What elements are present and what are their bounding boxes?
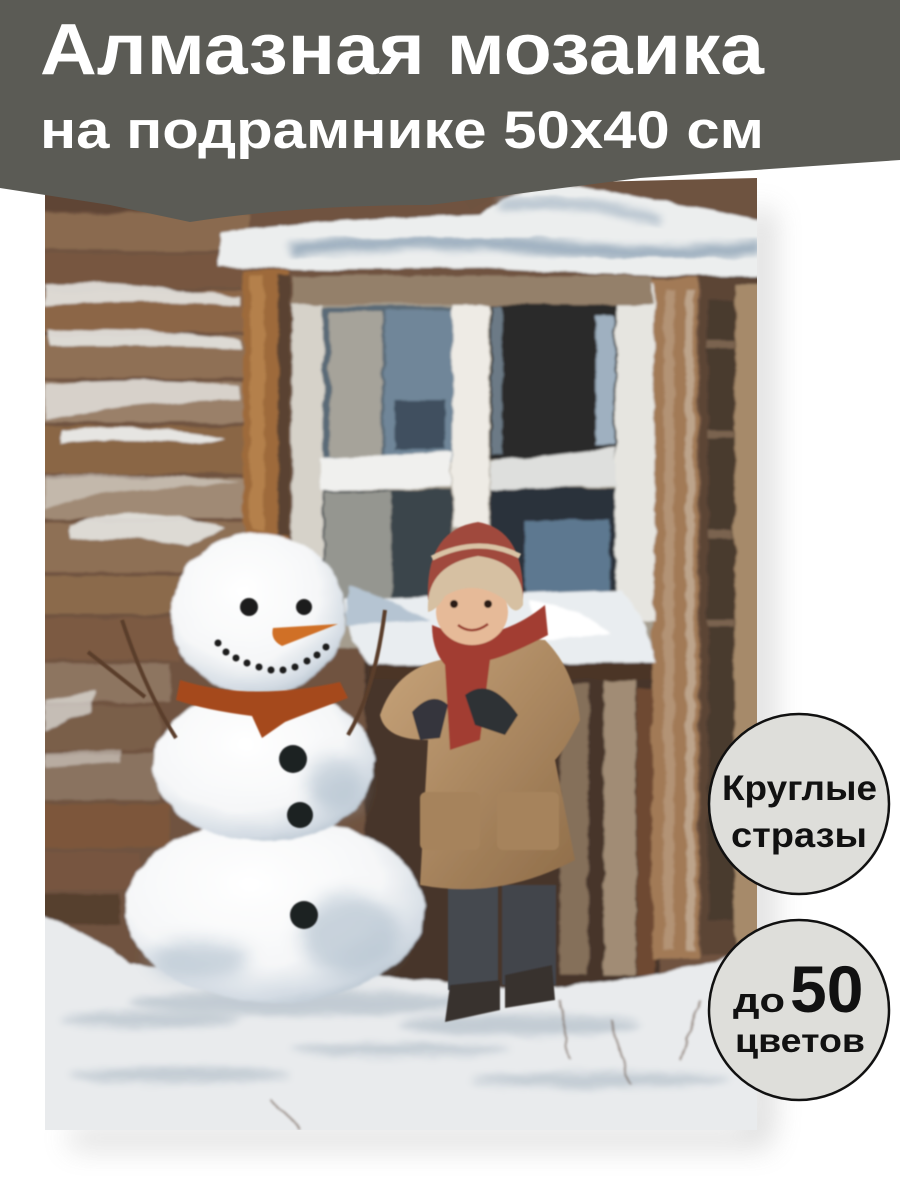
face [436, 579, 508, 645]
snowman features [88, 598, 385, 929]
snowman [125, 533, 425, 1003]
subtitle: на подрамнике 50х40 см [40, 101, 764, 160]
badge: up to 50 colours: до [733, 982, 785, 1020]
snow ground [45, 914, 757, 1130]
coat [380, 639, 580, 889]
snow on logs [45, 283, 240, 768]
badge: round rhinestones [709, 714, 889, 894]
wooden door below window [365, 660, 660, 990]
scarf [176, 680, 348, 738]
hat [428, 522, 523, 612]
gloves [412, 688, 518, 740]
boots [445, 965, 555, 1022]
smile [214, 640, 330, 674]
badge: up to 50 colours: цветов [735, 1022, 865, 1059]
snowman middle [153, 689, 375, 841]
title: Алмазная мозаика [40, 10, 765, 90]
child eyes and mouth [450, 600, 492, 630]
snow on the roof [218, 188, 770, 276]
snow on the sill [345, 585, 655, 665]
pane: lower right [488, 485, 618, 594]
buttons [279, 745, 318, 929]
canvas shadow [70, 210, 774, 1148]
snowman body shading [150, 757, 400, 978]
header band [0, 0, 900, 222]
badge: round rhinestones: Круглые [722, 769, 877, 808]
window [292, 276, 654, 648]
carrot nose [272, 624, 338, 646]
coat pockets [420, 792, 559, 850]
child [380, 522, 580, 1022]
pane: upper left [323, 306, 453, 461]
red scarf [432, 605, 548, 750]
badge: up to 50 colours: 50 [790, 952, 863, 1026]
pane: lower left [322, 490, 452, 615]
eyes [240, 598, 312, 616]
snowman bottom [125, 817, 425, 1003]
log wall [30, 190, 250, 924]
left post [243, 270, 290, 540]
stick arms [88, 610, 385, 738]
badge: up to 50 colours [709, 920, 889, 1100]
right wall logs [698, 275, 757, 955]
pane: upper right [490, 304, 616, 461]
badge: round rhinestones: стразы [731, 816, 867, 855]
snowman head [171, 533, 345, 695]
legs [448, 885, 556, 990]
wood above the roof snow [440, 165, 770, 225]
painting: snowman and child at a cabin window [30, 165, 770, 1145]
right post [652, 278, 698, 958]
